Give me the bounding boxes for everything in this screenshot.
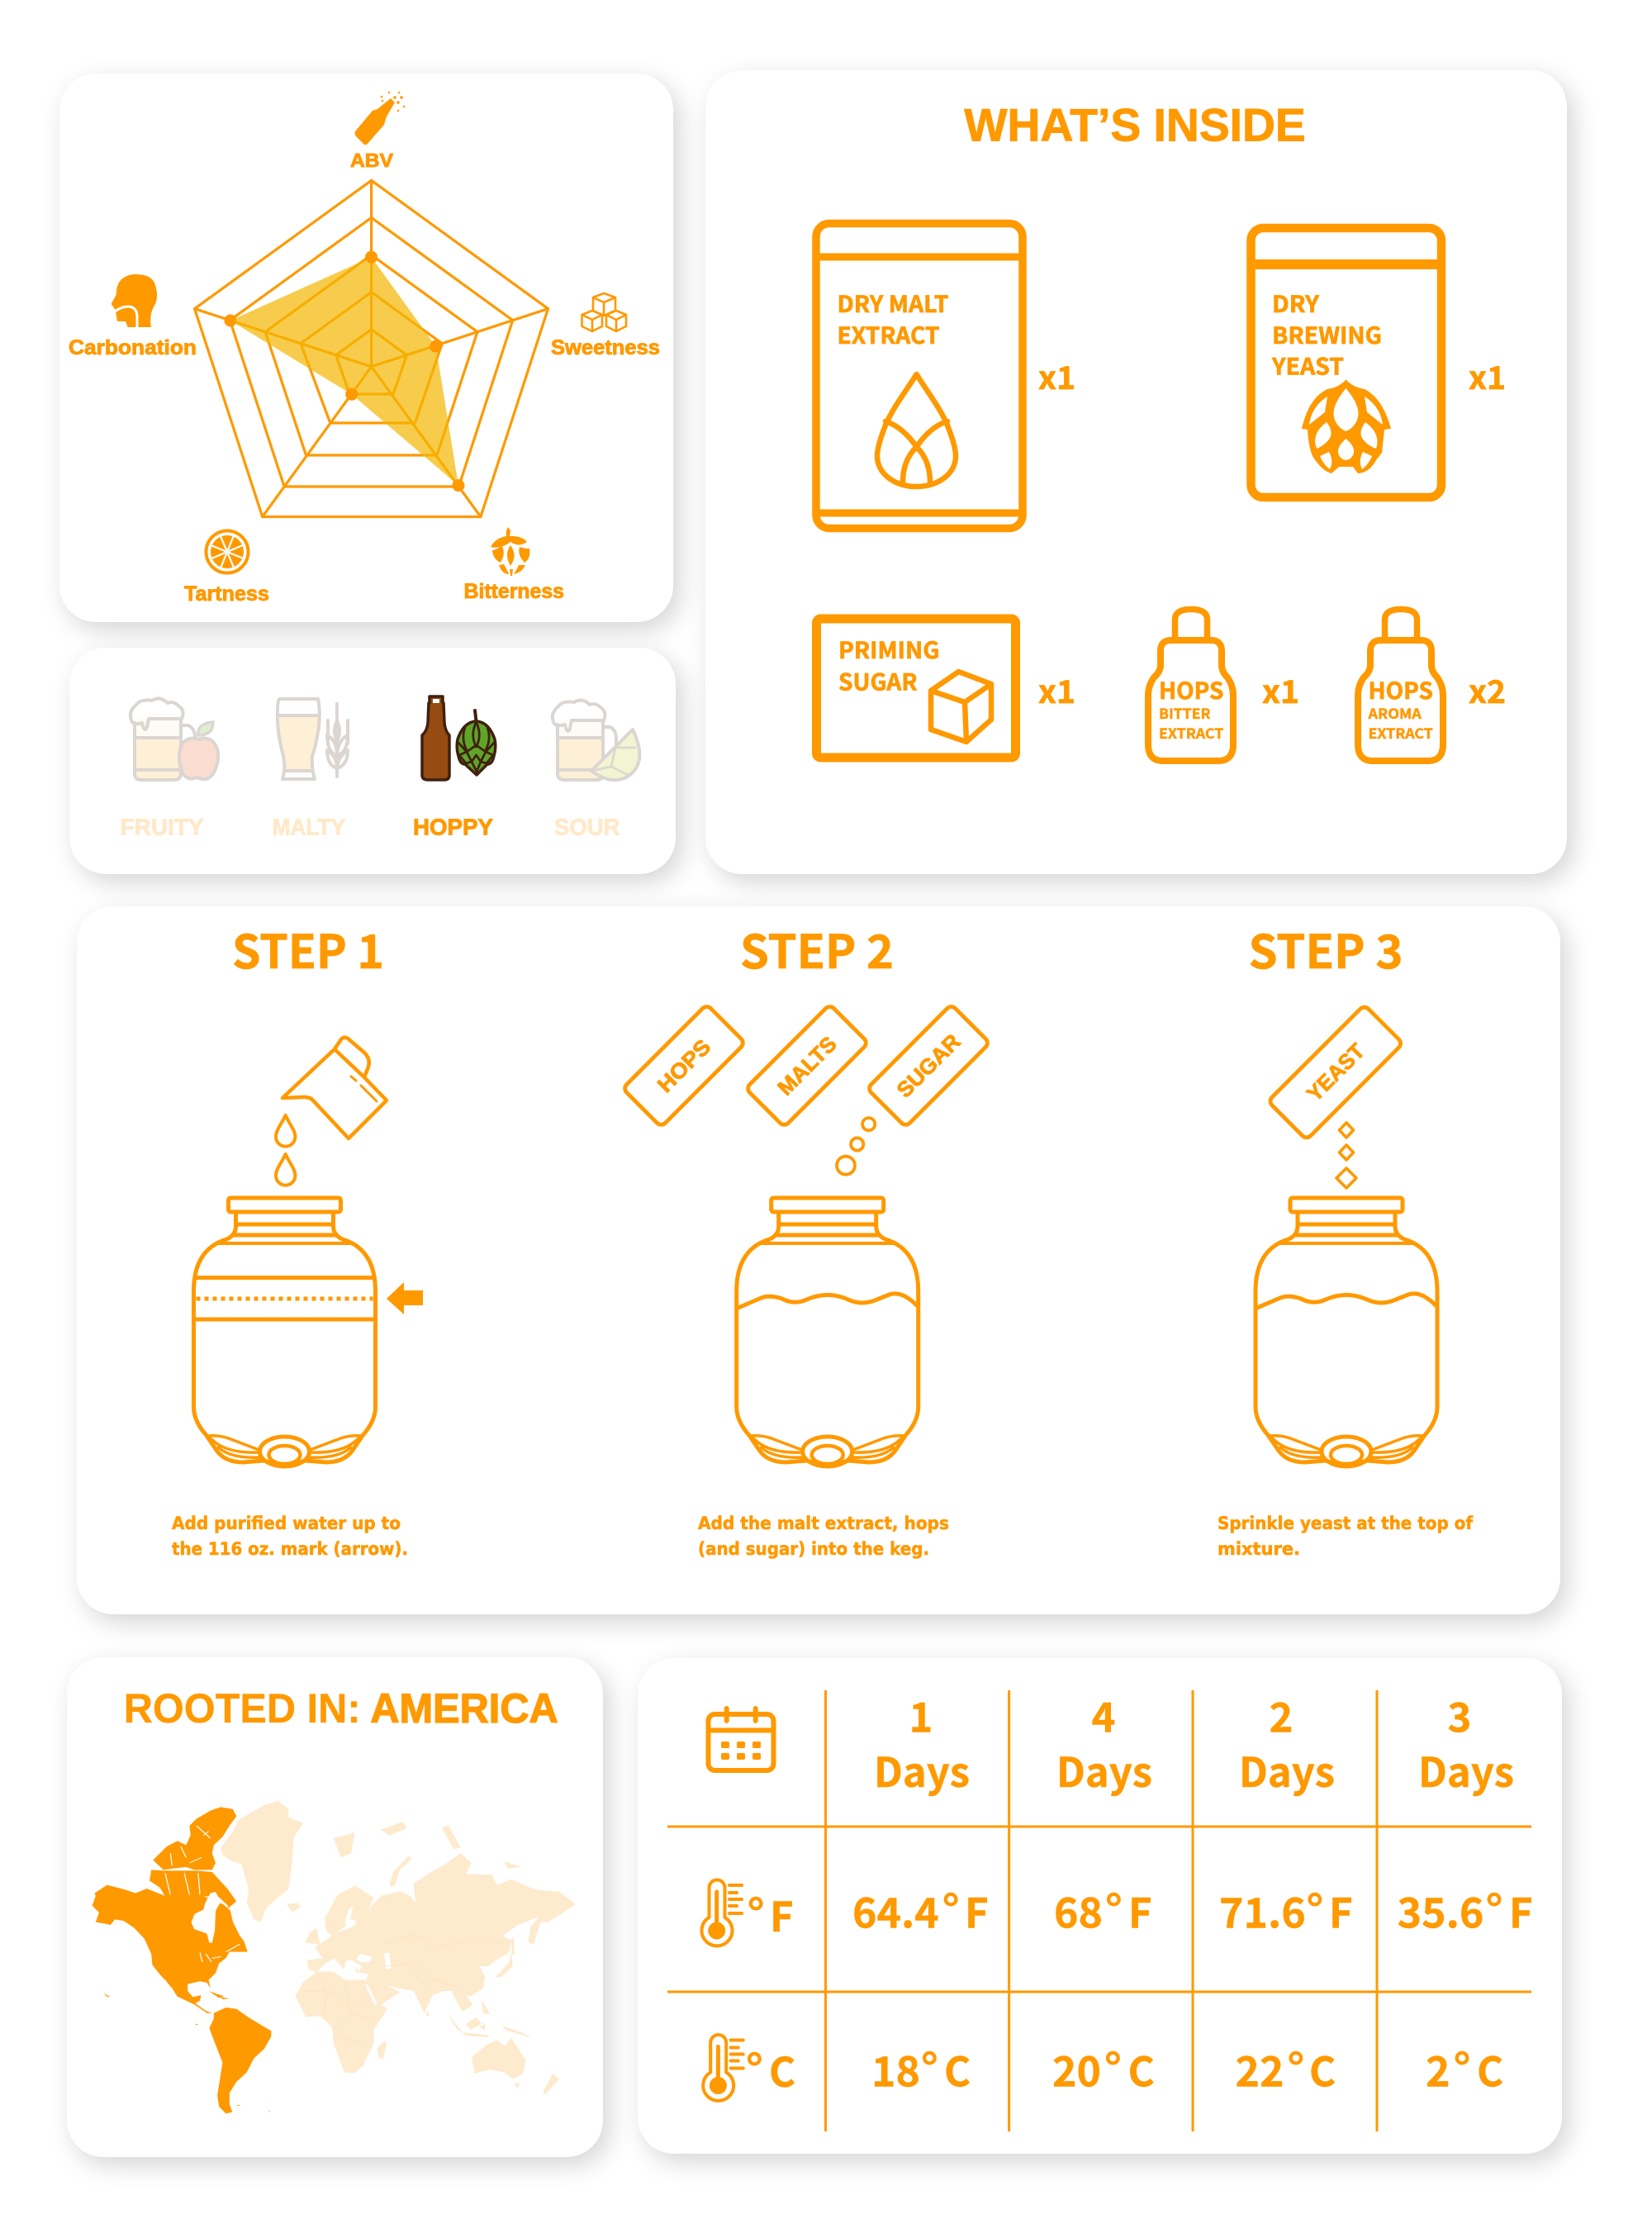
row values: fahrenheit: F xyxy=(1128,1882,1152,1941)
row label: celsius: C xyxy=(769,2041,795,2099)
item: dry brewing yeast bag: BREWING xyxy=(1272,318,1382,351)
label: MALTY: MALTY xyxy=(273,815,345,840)
row label: fahrenheit xyxy=(702,1876,794,1958)
item: hops aroma extract bottle: HOPS xyxy=(1368,673,1433,706)
panel: beer style selector xyxy=(69,648,676,874)
row values: fahrenheit: F xyxy=(965,1882,989,1941)
item: dry malt extract bag xyxy=(816,223,1023,529)
text: step 2 instructions: Add the malt extract, hops xyxy=(698,1513,949,1533)
row values: fahrenheit: 35.6 xyxy=(1398,1881,1483,1941)
map: americas xyxy=(91,1807,271,2113)
row label: celsius: ˚ xyxy=(747,2031,765,2113)
row values: celsius: 2 xyxy=(1426,2039,1450,2098)
row label: fahrenheit: F xyxy=(770,1885,794,1944)
radar chart xyxy=(195,180,548,517)
panel: what's inside xyxy=(705,70,1567,874)
text: step 3 instructions xyxy=(1218,1513,1474,1559)
item: priming sugar box xyxy=(816,619,1016,758)
icon: head and throat xyxy=(112,274,157,327)
text: step 3 instructions: Sprinkle yeast at the top of xyxy=(1218,1513,1474,1533)
row values: celsius: 18 xyxy=(871,2039,920,2098)
icon: bottle popping xyxy=(355,92,405,145)
text: step 1 instructions: Add purified water up to xyxy=(172,1513,401,1533)
label: Tartness: Tartness xyxy=(184,582,269,606)
heading: what's inside: WHAT’S INSIDE xyxy=(964,99,1306,151)
row label: fahrenheit: ˚ xyxy=(748,1876,767,1958)
icon: hops sachet: HOPS xyxy=(653,1034,715,1097)
icon: orange slice xyxy=(203,528,251,576)
text: step 2 instructions xyxy=(698,1513,949,1559)
illustration: keg with liquid xyxy=(737,1198,919,1466)
row values: celsius: ˚ xyxy=(1288,2031,1307,2112)
quantity: malt: x1 xyxy=(1038,353,1075,398)
row values: fahrenheit: 71.6 xyxy=(1219,1881,1306,1941)
icon: wheat beer glass and grain xyxy=(278,699,348,779)
quantity: hops bitter: x1 xyxy=(1262,667,1299,712)
panel: brewing steps xyxy=(77,906,1560,1614)
row values: celsius: ˚ xyxy=(922,2031,940,2112)
icon: beer bottle and hop cone xyxy=(422,696,496,780)
row values: celsius: C xyxy=(1477,2041,1503,2098)
label: Bitterness: Bitterness xyxy=(464,580,564,603)
heading: step 3: STEP 3 xyxy=(1249,915,1403,982)
map: borders xyxy=(302,1935,511,2043)
header: 2 days: Days xyxy=(1239,1741,1335,1799)
text: step 2 instructions: (and sugar) into the keg. xyxy=(698,1539,929,1559)
row label: celsius xyxy=(703,2031,795,2113)
icon: malts sachet xyxy=(746,1005,868,1127)
row values: celsius: ˚ xyxy=(1105,2031,1123,2112)
row values: celsius: C xyxy=(944,2041,971,2098)
arrow: fill mark xyxy=(387,1282,423,1314)
heading: rooted in america: ROOTED IN: AMERICA xyxy=(124,1685,558,1732)
map: seas xyxy=(337,1906,392,2005)
icon: fruity beer mug and apple xyxy=(131,699,218,780)
row values: fahrenheit: F xyxy=(1509,1882,1533,1941)
icon: hop cone xyxy=(1302,380,1391,473)
row values: celsius xyxy=(871,2031,1503,2112)
item: dry malt extract bag: EXTRACT xyxy=(838,318,940,351)
item: hops bitter extract bottle xyxy=(1148,610,1233,761)
illustration: keg with fill mark xyxy=(193,1198,375,1466)
row values: fahrenheit: ˚ xyxy=(1106,1872,1124,1954)
map: world with Americas highlighted xyxy=(91,1801,576,2113)
header: 3 days xyxy=(1418,1685,1514,1799)
icon: falling yeast granules xyxy=(1336,1123,1356,1188)
row values: fahrenheit xyxy=(852,1872,1533,1954)
text: step 1 instructions: the 116 oz. mark (arrow). xyxy=(172,1539,408,1559)
row values: fahrenheit: ˚ xyxy=(1486,1872,1505,1954)
header: 4 days: Days xyxy=(1056,1741,1152,1799)
item: hops bitter extract bottle: EXTRACT xyxy=(1159,722,1224,743)
text: step 1 instructions xyxy=(172,1513,408,1559)
icon: yeast sachet: YEAST xyxy=(1302,1038,1370,1106)
item: dry brewing yeast bag: DRY xyxy=(1272,287,1320,320)
icon: sugar cube xyxy=(931,672,991,742)
header: 2 days: 2 xyxy=(1270,1685,1293,1744)
row values: fahrenheit: ˚ xyxy=(942,1872,961,1954)
quantity: yeast: x1 xyxy=(1469,353,1506,398)
icon: falling bubbles xyxy=(837,1118,875,1175)
icon: calendar xyxy=(709,1708,773,1770)
quantity: sugar: x1 xyxy=(1038,667,1075,712)
item: dry malt extract bag: DRY MALT xyxy=(838,287,948,320)
icon: malt drop xyxy=(877,374,956,487)
label: Carbonation: Carbonation xyxy=(69,336,197,359)
row values: celsius: C xyxy=(1128,2041,1155,2098)
row values: celsius: 20 xyxy=(1052,2039,1101,2098)
row values: fahrenheit: ˚ xyxy=(1307,1872,1326,1954)
item: hops aroma extract bottle: AROMA xyxy=(1367,702,1422,723)
icon: yeast sachet xyxy=(1268,1005,1403,1140)
header: 3 days: Days xyxy=(1418,1741,1514,1799)
row values: fahrenheit: 68 xyxy=(1054,1881,1103,1941)
item: hops bitter extract bottle: HOPS xyxy=(1159,673,1223,706)
item: hops aroma extract bottle: EXTRACT xyxy=(1368,722,1433,743)
label: SOUR: SOUR xyxy=(554,815,620,840)
panel: flavor radar chart xyxy=(59,74,673,622)
header: 4 days: 4 xyxy=(1092,1685,1115,1744)
item: priming sugar box: SUGAR xyxy=(838,664,917,697)
heading: step 2: STEP 2 xyxy=(740,915,894,982)
panel: fermentation schedule table xyxy=(638,1658,1562,2154)
quantity: hops aroma: x2 xyxy=(1469,667,1506,712)
header: 1 days xyxy=(874,1685,970,1799)
header: 1 days: Days xyxy=(874,1741,970,1799)
item: dry brewing yeast bag: YEAST xyxy=(1271,349,1344,382)
heading: step 1: STEP 1 xyxy=(232,915,384,982)
illustration: keg with yeast xyxy=(1256,1198,1437,1466)
icon: sugar sachet xyxy=(867,1005,990,1127)
text: step 3 instructions: mixture. xyxy=(1218,1539,1300,1559)
panel: origin map xyxy=(67,1657,603,2157)
item: hops aroma extract bottle xyxy=(1358,610,1443,761)
row values: celsius: 22 xyxy=(1236,2039,1284,2098)
icon: water drops xyxy=(276,1115,295,1186)
label: ABV: ABV xyxy=(350,150,394,171)
icon: malts sachet: MALTS xyxy=(772,1031,842,1100)
icon: sour beer mug and lime xyxy=(553,701,639,780)
header: 2 days xyxy=(1239,1685,1335,1799)
header: 1 days: 1 xyxy=(909,1685,933,1744)
map: rest of world xyxy=(221,1801,576,2094)
icon: sugar cubes xyxy=(582,293,626,331)
row values: celsius: C xyxy=(1309,2041,1336,2098)
item: hops bitter extract bottle: BITTER xyxy=(1159,702,1211,723)
header: 4 days xyxy=(1056,1685,1152,1799)
icon: hop xyxy=(491,527,529,576)
label: Sweetness: Sweetness xyxy=(551,336,660,359)
item: priming sugar box: PRIMING xyxy=(838,633,940,666)
icon: hops sachet xyxy=(623,1005,745,1127)
map: inland water xyxy=(188,1892,221,1997)
item: dry brewing yeast bag xyxy=(1247,228,1446,497)
icon: pitcher pouring xyxy=(282,1038,387,1138)
label: FRUITY: FRUITY xyxy=(121,815,204,840)
label: HOPPY: HOPPY xyxy=(413,815,493,840)
row values: fahrenheit: F xyxy=(1329,1882,1353,1941)
icon: sugar sachet: SUGAR xyxy=(891,1029,966,1103)
row values: fahrenheit: 64.4 xyxy=(852,1881,939,1941)
row values: celsius: ˚ xyxy=(1454,2031,1473,2112)
table grid xyxy=(667,1690,1531,2131)
header: 3 days: 3 xyxy=(1448,1685,1471,1744)
